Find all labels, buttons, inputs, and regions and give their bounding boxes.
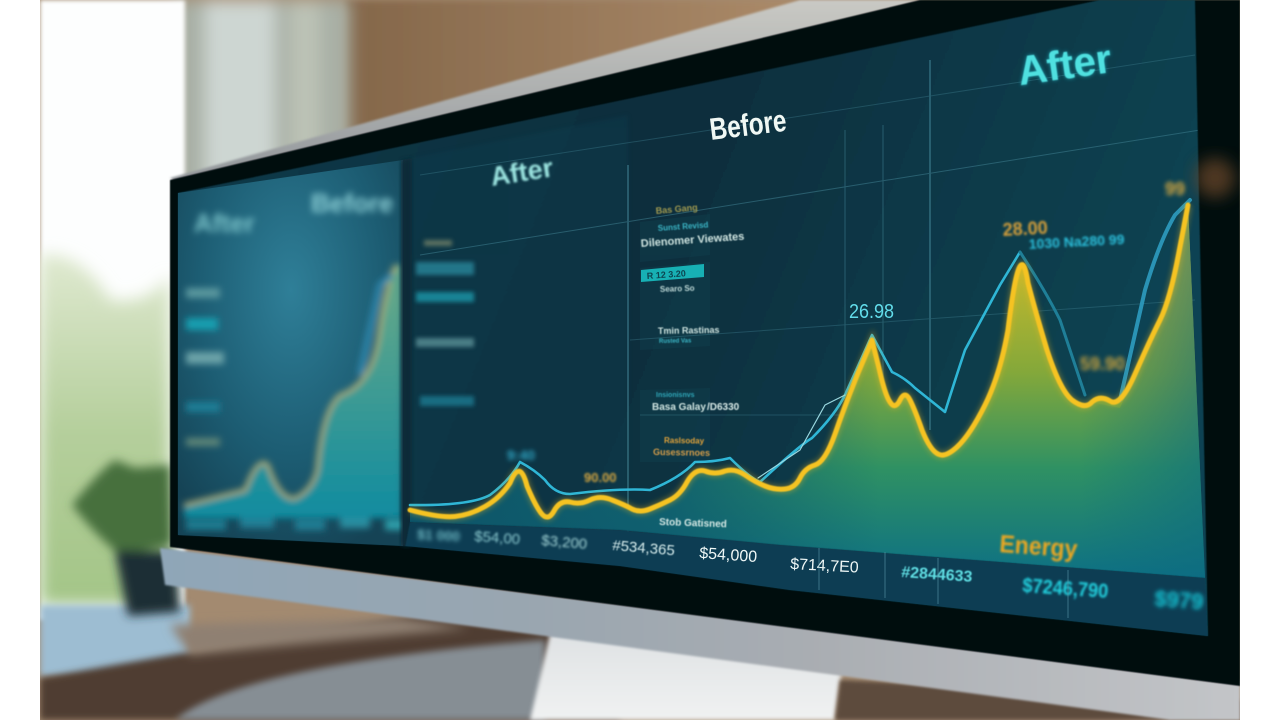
left panel headings: After: [194, 208, 255, 238]
sill shelf: [170, 618, 470, 655]
left panel axis labels: [186, 520, 226, 530]
monitor frame: top edge: [170, 0, 925, 192]
screen: [178, 0, 1208, 636]
curtain: [180, 0, 360, 174]
axis separators: [819, 548, 1068, 618]
list: section one: [640, 202, 745, 250]
list backing boxes: [640, 214, 710, 462]
divider between screen panels: [401, 158, 412, 546]
left page margin: [0, 0, 40, 720]
window sill: [40, 605, 190, 677]
heading: After (center): After: [488, 152, 556, 192]
list: section five: Gusessrnoes: [653, 447, 710, 458]
axis: 8: $7246,790: [1022, 575, 1109, 603]
small dip labels: 9:40: [507, 447, 535, 463]
wall: [344, 0, 770, 128]
window: [40, 0, 185, 620]
yellow data line: [410, 205, 1188, 517]
side list: [416, 202, 745, 458]
axis: 1: $1 000: [417, 526, 461, 544]
axis: 4: #534,365: [612, 537, 675, 559]
heading glow: After: [1015, 35, 1114, 94]
list: section three: Rusted Vas: [659, 338, 692, 345]
left panel chart: [184, 265, 402, 518]
chart caption: Stob Gatisned: [659, 517, 727, 530]
axis: 9: $979: [1154, 586, 1204, 614]
panel: left blurred dashboard: [178, 150, 405, 550]
heading text: After: [1015, 35, 1114, 94]
list: section one: Dilenomer Viewates: [640, 231, 745, 250]
monitor stand: [528, 635, 1240, 720]
dip value: 59.90: [1080, 354, 1125, 374]
desk: [40, 615, 620, 720]
value label: 26.98: 26.98: [849, 301, 894, 323]
warm highlight on bezel: [1195, 158, 1235, 198]
value labels: peaks: 90.00: [584, 470, 617, 485]
list: section three: Tmin Rastinas: [658, 325, 720, 336]
list: section three: [658, 325, 720, 345]
left panel list: [186, 288, 220, 298]
garden view: [40, 255, 170, 605]
list: highlighted row: [641, 264, 704, 294]
lower desk surface: [175, 640, 545, 720]
value labels: peaks: [507, 179, 1185, 485]
x-axis band: [405, 522, 1208, 640]
panel: main chart: [405, 55, 1208, 640]
heading: Before: Before: [708, 103, 788, 147]
yellow line glow: [410, 205, 1188, 517]
axis: 7: #2844633: [901, 564, 973, 586]
list: faint column labels: [416, 240, 474, 406]
list: highlighted row: Searo So: [660, 284, 695, 294]
list: highlighted row: R 12 3.20: [646, 268, 686, 281]
monitor bezel: [170, 0, 1240, 686]
x-axis values: [417, 526, 1204, 614]
list: section five: Raslsoday: [664, 436, 705, 446]
left column tint: [412, 115, 628, 540]
list: section one: Bas Gang: [655, 202, 698, 216]
axis: 2: $54,00: [474, 528, 521, 548]
blue comparison line: [410, 200, 1190, 505]
list: section four: Insionisnvs: [656, 392, 695, 399]
axis: 5: $54,000: [699, 545, 758, 566]
panel: left blurred dashboard: Before: [311, 188, 393, 218]
axis: 3: $3,200: [541, 532, 588, 553]
peak caption: 1030 Na280 99: [1028, 231, 1125, 252]
far right value: 99: [1165, 179, 1185, 199]
list: section four: [652, 392, 740, 413]
heading: After (top right): [1015, 35, 1114, 94]
chart area fill: [410, 205, 1205, 578]
list: section four: Basa Galay: [652, 402, 706, 413]
grid lines: [420, 55, 1200, 535]
list: section four: /D6330: [707, 402, 740, 413]
axis: 6: $714,7E0: [790, 556, 859, 577]
right page margin: [1240, 0, 1280, 720]
monitor frame: bottom edge: [160, 548, 1240, 720]
icon: potted plant: [72, 460, 180, 616]
list: section one: Sunst Revisd: [658, 220, 709, 233]
list: section five: [653, 436, 710, 458]
label: Energy: Energy: [999, 530, 1078, 563]
peak value 28.00: 28.00: [1002, 218, 1048, 240]
